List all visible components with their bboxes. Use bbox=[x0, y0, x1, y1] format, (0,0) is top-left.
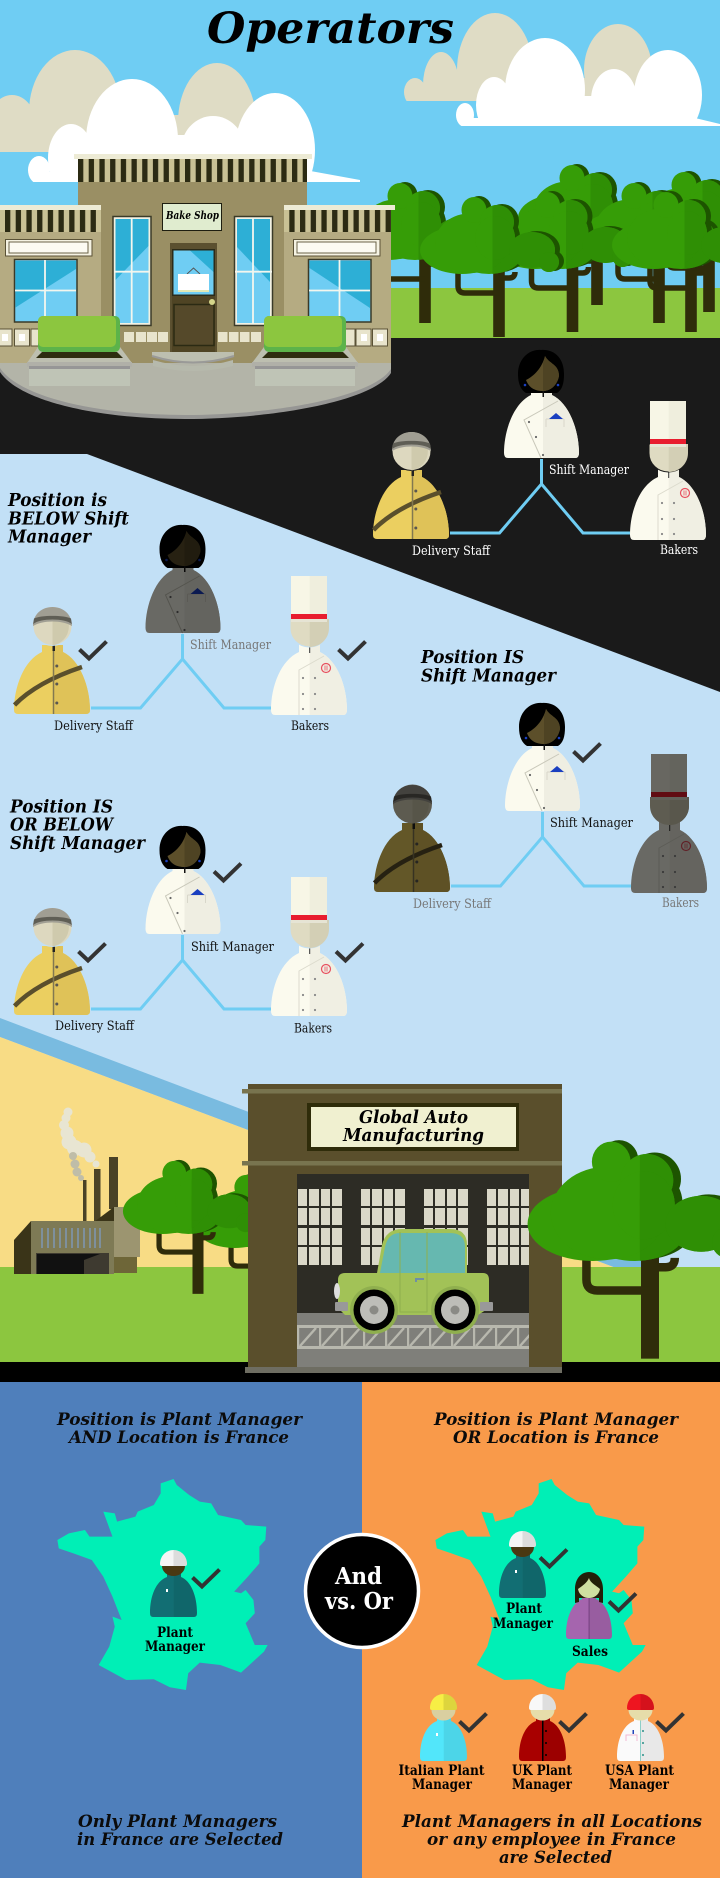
plant sign bbox=[307, 1103, 519, 1151]
person: delivery staff bbox=[14, 606, 90, 714]
person: delivery staff dimmed bbox=[374, 784, 450, 892]
heading: and condition bbox=[56, 1410, 303, 1448]
panel: or (orange) bbox=[362, 1382, 720, 1878]
heading: position is shift manager: Position IS bbox=[420, 648, 524, 668]
label: uk plant manager: Manager bbox=[512, 1777, 573, 1793]
heading: and condition: AND Location is France bbox=[67, 1428, 289, 1448]
person: baker dimmed bbox=[631, 754, 707, 893]
heading: position is or below shift manager: OR BELOW bbox=[10, 816, 115, 836]
label: uk plant manager: UK Plant bbox=[512, 1763, 573, 1779]
person: italian plant manager bbox=[420, 1694, 467, 1761]
label: plant manager: Manager bbox=[145, 1639, 206, 1655]
right shop window bbox=[308, 260, 371, 322]
person: shift manager bbox=[504, 350, 579, 458]
plant sign: Global Auto bbox=[359, 1107, 468, 1128]
label: italian plant manager bbox=[398, 1763, 485, 1793]
person: shift manager dimmed bbox=[146, 525, 220, 633]
heading: and condition: Position is Plant Manager bbox=[56, 1410, 303, 1430]
clouds bbox=[0, 13, 720, 207]
heading: position is below shift manager bbox=[7, 491, 129, 548]
grass: bakery scene bbox=[380, 288, 720, 340]
blue diagonal band bbox=[0, 1018, 720, 1307]
labels: Delivery Staff bbox=[54, 719, 135, 734]
labels bbox=[54, 638, 329, 734]
shop steps bbox=[152, 352, 234, 371]
checkmark bbox=[80, 642, 106, 658]
checkmark bbox=[540, 1550, 567, 1566]
label: plant manager: Plant bbox=[506, 1601, 543, 1617]
grass: factory scene bbox=[0, 1267, 720, 1363]
labels: Shift Manager bbox=[550, 816, 634, 831]
shop sign bbox=[162, 204, 222, 230]
factory in the distance bbox=[14, 1108, 140, 1274]
checkmark bbox=[338, 642, 366, 658]
checkmark bbox=[336, 944, 363, 960]
label: sales: Sales bbox=[572, 1644, 608, 1660]
heading: position is below shift manager: BELOW Shift bbox=[7, 510, 129, 530]
map: France bbox=[435, 1479, 646, 1690]
background: dark band bbox=[0, 338, 720, 458]
labels: Shift Manager bbox=[191, 940, 275, 955]
caption: and result: in France are Selected bbox=[77, 1830, 283, 1850]
labels: Bakers bbox=[662, 896, 699, 911]
right planter bbox=[252, 316, 358, 386]
map: France bbox=[57, 1479, 268, 1690]
checkmark bbox=[214, 864, 241, 880]
labels: Shift Manager bbox=[190, 638, 272, 653]
label: plant manager: Manager bbox=[493, 1616, 554, 1632]
labels: Bakers bbox=[294, 1022, 332, 1036]
trees by the factory bbox=[123, 1160, 332, 1294]
heading: position is or below shift manager: Position IS bbox=[9, 798, 113, 818]
person: baker bbox=[271, 576, 347, 715]
checkmark bbox=[656, 1714, 684, 1730]
label: uk plant manager bbox=[512, 1763, 573, 1793]
heading: position is shift manager bbox=[420, 648, 558, 686]
heading: or condition: Position is Plant Manager bbox=[433, 1410, 679, 1430]
person: uk plant manager bbox=[519, 1694, 566, 1761]
heading: position is below shift manager: Position is bbox=[7, 491, 107, 511]
heading: position is shift manager: Shift Manager bbox=[421, 666, 558, 686]
yellow ground wedge bbox=[0, 1037, 720, 1307]
label: plant manager: Plant bbox=[157, 1625, 194, 1641]
heading: position is or below shift manager: Shift Manager bbox=[10, 834, 147, 854]
car bbox=[334, 1229, 493, 1334]
plant sign: Manufacturing bbox=[342, 1125, 484, 1146]
person: plant manager bbox=[499, 1531, 546, 1598]
badge: and vs. or bbox=[306, 1534, 418, 1648]
plant interior bbox=[297, 1174, 529, 1367]
label: usa plant manager: USA Plant bbox=[605, 1763, 675, 1779]
label: plant manager bbox=[145, 1625, 206, 1655]
heading: or condition bbox=[433, 1410, 679, 1448]
labels: Delivery Staff bbox=[55, 1019, 136, 1034]
person: shift manager bbox=[505, 703, 580, 811]
person: shift manager bbox=[146, 826, 220, 934]
label: usa plant manager: Manager bbox=[609, 1777, 670, 1793]
checkmark bbox=[192, 1570, 220, 1586]
heading: position is or below shift manager bbox=[9, 798, 147, 854]
panel: and (blue) bbox=[0, 1382, 362, 1878]
labels bbox=[413, 816, 699, 912]
caption: and result: Only Plant Managers bbox=[78, 1812, 277, 1832]
person: plant manager bbox=[150, 1550, 197, 1617]
label: italian plant manager: Manager bbox=[412, 1777, 473, 1793]
bake shop building bbox=[0, 154, 395, 419]
large tree bbox=[528, 1140, 720, 1359]
heading: position is below shift manager: Manager bbox=[7, 528, 93, 548]
checkmark bbox=[560, 1714, 586, 1730]
background: light blue section bbox=[0, 454, 720, 1380]
labels bbox=[55, 940, 332, 1036]
road strip bbox=[0, 1362, 720, 1382]
org chart: below shift manager bbox=[14, 525, 366, 734]
left planter bbox=[27, 316, 132, 386]
checkmark bbox=[574, 744, 600, 760]
org chart: is or below shift manager bbox=[14, 826, 363, 1036]
caption: or result: Plant Managers in all Locations bbox=[401, 1812, 702, 1832]
caption: or result: or any employee in France bbox=[427, 1830, 676, 1850]
label: usa plant manager bbox=[605, 1763, 675, 1793]
checkmark bbox=[609, 1594, 636, 1610]
person: baker bbox=[271, 877, 347, 1016]
checkmark bbox=[78, 944, 106, 960]
background: sky bbox=[0, 0, 720, 340]
shop sign: Bake Shop bbox=[165, 209, 219, 222]
org chart: is shift manager bbox=[374, 703, 707, 912]
org chart: all positions (on dark) bbox=[373, 350, 706, 559]
auto plant building bbox=[0, 1084, 720, 1878]
left shop window bbox=[14, 260, 77, 322]
tall windows bbox=[113, 216, 272, 326]
door bbox=[170, 243, 217, 353]
heading: or condition: OR Location is France bbox=[453, 1428, 659, 1448]
labels: Delivery Staff bbox=[413, 897, 493, 912]
person: delivery staff bbox=[14, 908, 90, 1015]
label: italian plant manager: Italian Plant bbox=[398, 1763, 485, 1779]
labels: Bakers bbox=[660, 543, 698, 558]
checkmark bbox=[460, 1714, 486, 1730]
label: plant manager bbox=[493, 1601, 554, 1632]
person: usa plant manager bbox=[617, 1694, 664, 1761]
person: baker bbox=[630, 401, 706, 540]
title: Operators bbox=[207, 4, 454, 54]
caption: or result: are Selected bbox=[499, 1848, 612, 1868]
labels: Shift Manager bbox=[549, 463, 630, 478]
caption: or result bbox=[401, 1812, 702, 1868]
badge: and vs. or: And bbox=[334, 1563, 382, 1590]
person: sales bbox=[566, 1572, 612, 1639]
person: delivery staff bbox=[373, 432, 449, 539]
badge: and vs. or: vs. Or bbox=[324, 1588, 394, 1615]
trees: forest behind bakery bbox=[346, 164, 720, 337]
labels: Bakers bbox=[291, 719, 329, 734]
labels bbox=[412, 463, 698, 559]
labels: Delivery Staff bbox=[412, 544, 492, 559]
tile band bbox=[0, 329, 388, 346]
caption: and result bbox=[77, 1812, 283, 1850]
